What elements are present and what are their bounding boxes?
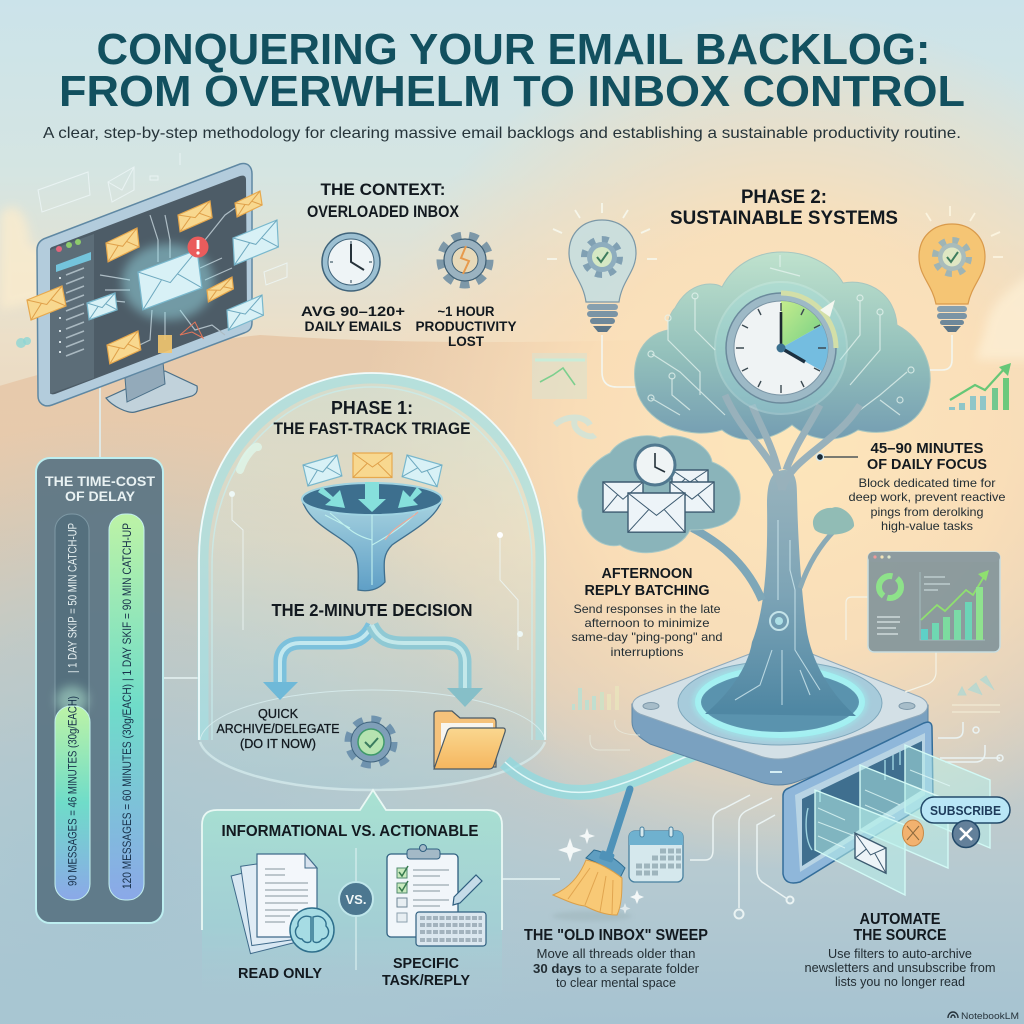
- text: automate the source: THE SOURCE: [854, 927, 946, 944]
- title: [59, 25, 965, 116]
- icon: green growth chart: [949, 363, 1011, 410]
- phase 2 heading: PHASE 2:: [741, 187, 827, 208]
- text: automate the source: lists you no longer read: [835, 975, 965, 989]
- icon: small cloud with envelopes: [578, 436, 740, 553]
- text: 45-90 minutes of daily focus: high-value tasks: [881, 519, 973, 533]
- text: afternoon reply batching: AFTERNOON: [602, 566, 692, 582]
- panel: informational vs actionable: [202, 790, 502, 1000]
- phase 1 heading: PHASE 1:: [331, 398, 413, 418]
- small right cloud: [813, 507, 854, 535]
- panel heading: [45, 473, 155, 504]
- dome glass: [199, 373, 545, 790]
- icon: funnel with envelopes: [302, 453, 442, 591]
- text: 45-90 minutes of daily focus: [848, 441, 1006, 533]
- monitor body: [37, 164, 252, 406]
- text: afternoon reply batching: Send responses in the late: [574, 602, 721, 616]
- connector: info box to broom: [502, 878, 560, 880]
- label: specific task: TASK/REPLY: [382, 973, 470, 989]
- faint bar chart: [572, 686, 640, 750]
- icon: clock in tree: [715, 282, 847, 414]
- faint icons right of platform: [952, 676, 1000, 712]
- text: afternoon reply batching: interruptions: [610, 645, 684, 659]
- text: afternoon reply batching: afternoon to minimize: [584, 616, 710, 630]
- heading: the context: OVERLOADED INBOX: [307, 202, 460, 221]
- icon: folder: [434, 711, 505, 769]
- icon: right light bulb: [919, 206, 1003, 332]
- bar: 120 messages: | 1 DAY SKIF = 90 MIN CATCH-UP: [120, 523, 134, 681]
- title: CONQUERING YOUR EMAIL BACKLOG:: [96, 25, 930, 74]
- icon: gear with check: [349, 720, 393, 764]
- icon: clipboard and keyboard: [387, 844, 486, 946]
- bar: 90 messages: | 1 DAY SKIP = 50 MIN CATCH-UP: [66, 523, 80, 673]
- sparkles: [558, 828, 644, 914]
- circuit lines to device: [690, 722, 1003, 918]
- icon: left light bulb: [547, 203, 657, 332]
- glass pane 3: [905, 745, 990, 848]
- phase 2 heading: SUSTAINABLE SYSTEMS: [670, 208, 898, 229]
- panel heading: OF DELAY: [65, 488, 136, 504]
- phase 1 heading: THE FAST-TRACK TRIAGE: [274, 419, 470, 438]
- icon: clock: [322, 233, 380, 291]
- envelopes: [27, 191, 278, 364]
- context stat: productivity: [416, 304, 516, 349]
- subscribe button: [921, 797, 1010, 823]
- connector: time-cost panel to dome: [163, 677, 200, 679]
- context stat: emails: [301, 304, 405, 334]
- text: old inbox sweep: 30 days to a separate folder: [533, 962, 699, 976]
- funnel body: [302, 500, 442, 591]
- vs badge: VS.: [346, 892, 366, 907]
- box heading: INFORMATIONAL VS. ACTIONABLE: [222, 823, 479, 840]
- panel: time-cost of delay: [36, 458, 163, 923]
- funnel arrows: [318, 482, 422, 512]
- context stat: emails: AVG 90–120+: [301, 304, 405, 319]
- alert badge: [188, 236, 208, 258]
- icon: broken gear: [441, 236, 489, 284]
- title: FROM OVERWHELM TO INBOX CONTROL: [59, 67, 965, 116]
- quick archive label: (DO IT NOW): [240, 736, 316, 751]
- text: old inbox sweep: Move all threads older than: [536, 947, 696, 961]
- text: automate the source: AUTOMATE: [860, 911, 940, 928]
- monitor stand: [106, 362, 197, 412]
- orange badge: [902, 820, 924, 846]
- label: specific task: [382, 956, 470, 989]
- text: 45-90 minutes of daily focus: OF DAILY FOCUS: [867, 457, 987, 473]
- context stat: productivity: PRODUCTIVITY: [416, 319, 516, 334]
- panel: analytics dashboard: [868, 552, 1000, 652]
- circuit traces in canopy: [648, 255, 914, 425]
- small charts and faint decor: [532, 353, 595, 436]
- ribbon: dome to platform: [505, 752, 697, 792]
- phase 1 heading: [274, 398, 470, 438]
- circuits on trunk: [735, 520, 820, 705]
- decision heading: THE 2-MINUTE DECISION: [272, 600, 472, 620]
- icon: broom: [552, 789, 632, 921]
- text: 45-90 minutes of daily focus: Block dedicated time for: [858, 476, 996, 490]
- heading: the context: [307, 180, 460, 221]
- panel: phase 1 dome: [199, 373, 545, 790]
- glow behind main envelope: [122, 244, 214, 320]
- icon: tree: [635, 252, 930, 716]
- quick archive label: ARCHIVE/DELEGATE: [216, 721, 340, 736]
- quick archive label: QUICK: [258, 706, 298, 721]
- icon: documents with brain: [231, 854, 334, 954]
- text: afternoon reply batching: [572, 566, 722, 659]
- text: afternoon reply batching: REPLY BATCHING: [584, 583, 710, 599]
- text: 45-90 minutes of daily focus: deep work, prevent reactive: [848, 490, 1006, 504]
- quick archive label: [216, 706, 340, 751]
- context stat: productivity: LOST: [448, 334, 485, 349]
- context stat: productivity: ~1 HOUR: [438, 304, 495, 319]
- text: automate the source: [804, 911, 996, 989]
- circuit traces: [100, 208, 235, 352]
- trunk: [705, 470, 856, 716]
- glass pane 1: [815, 790, 905, 895]
- vs badge: [339, 882, 373, 916]
- phase 2 heading: [670, 187, 898, 229]
- label: read only: READ ONLY: [238, 966, 322, 982]
- connector: monitor to time-cost panel: [99, 378, 101, 458]
- sidebar: [50, 234, 94, 394]
- icon: computer monitor with flying emails: [16, 153, 287, 412]
- text: 45-90 minutes of daily focus: 45–90 MINUTES: [870, 441, 984, 457]
- arrow: to quick archive: [263, 625, 372, 700]
- text: automate the source: Use filters to auto-archive: [828, 947, 972, 961]
- subtitle: A clear, step-by-step methodology for clearing massive email backlogs and establishing a sustainable productivity routine.: [43, 125, 961, 142]
- text: old inbox sweep: [524, 927, 708, 990]
- text: old inbox sweep: THE "OLD INBOX" SWEEP: [524, 927, 708, 944]
- arrow: to folder: [372, 625, 483, 707]
- monitor screen: [50, 176, 247, 394]
- icon: calendar: [629, 827, 683, 882]
- bar: 120 messages: [109, 514, 144, 900]
- bar: 90 messages: [55, 514, 90, 900]
- glass pane 2: [860, 765, 948, 868]
- platform: [632, 647, 928, 785]
- subscribe button: SUBSCRIBE: [930, 803, 1001, 818]
- label: specific task: SPECIFIC: [393, 956, 460, 972]
- panel: automate device: [783, 722, 1010, 895]
- text: automate the source: newsletters and unsubscribe from: [804, 961, 996, 975]
- envelope: [855, 833, 886, 873]
- text: 45-90 minutes of daily focus: pings from derolking: [870, 505, 984, 519]
- bar: 120 messages: 120 MESSAGES = 60 MINUTES (30g/EACH): [120, 684, 134, 889]
- connector lines from bulbs: [602, 335, 952, 387]
- close button: [952, 820, 980, 848]
- branches: [725, 395, 860, 490]
- faint icons above monitor: [38, 153, 287, 285]
- connector lines around dashboard: [846, 597, 936, 692]
- bar: 90 messages: 90 MESSAGES = 46 MINUTES (30g/EACH): [66, 696, 80, 886]
- context stat: emails: DAILY EMAILS: [304, 319, 402, 334]
- canopy: [635, 252, 930, 440]
- pointer: daily focus: [816, 453, 858, 461]
- heading: the context: THE CONTEXT:: [320, 180, 446, 199]
- text: old inbox sweep: to clear mental space: [556, 976, 676, 990]
- panel heading: THE TIME-COST: [45, 473, 155, 489]
- notebooklm badge: NotebookLM: [961, 1011, 1019, 1022]
- text: afternoon reply batching: same-day "ping-pong" and: [572, 630, 722, 644]
